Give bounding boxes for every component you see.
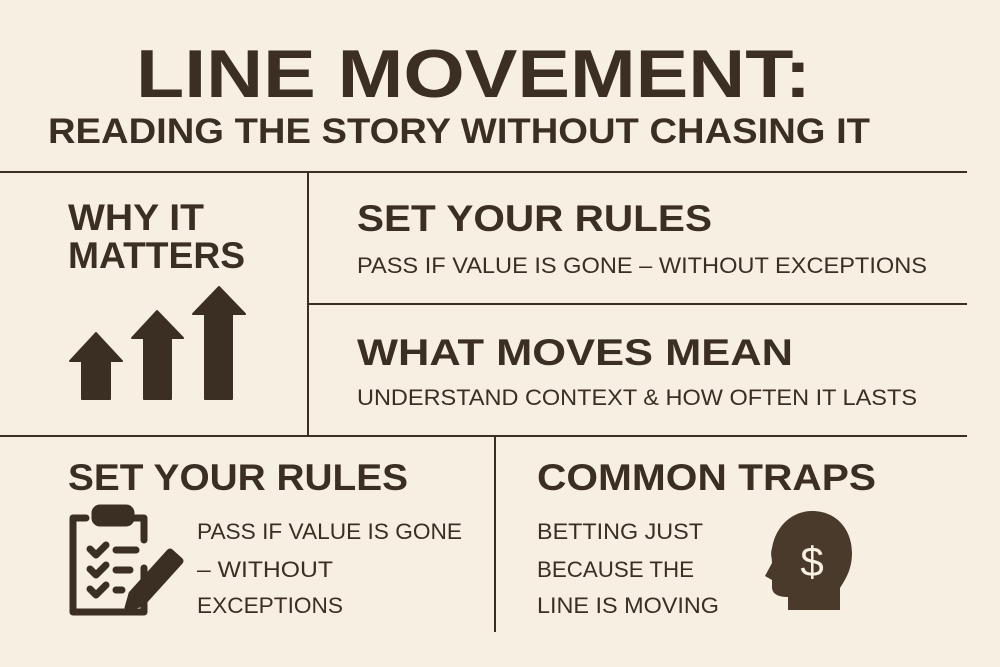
panel: why it matters: MATTERS	[68, 235, 245, 276]
panel: set your rules (top): SET YOUR RULES	[357, 198, 712, 239]
panel: common traps: LINE IS MOVING	[537, 593, 719, 618]
panel: common traps: BECAUSE THE	[537, 557, 694, 582]
panel: set your rules (bottom): – WITHOUT	[197, 557, 333, 582]
icon: rising arrows	[70, 287, 245, 399]
panel: set your rules (bottom): SET YOUR RULES	[68, 457, 408, 498]
panel: common traps: BETTING JUST	[537, 519, 703, 544]
panel: what moves mean: UNDERSTAND CONTEXT & HOW OFTEN IT LASTS	[357, 385, 917, 410]
icon: head with dollar	[765, 511, 852, 610]
icon: clipboard	[73, 508, 180, 612]
panel: common traps	[537, 457, 876, 618]
panel: set your rules (bottom): EXCEPTIONS	[197, 593, 343, 618]
icon: head with dollar: $	[800, 538, 824, 585]
panel: common traps: COMMON TRAPS	[537, 457, 876, 498]
panel: what moves mean: WHAT MOVES MEAN	[357, 332, 793, 373]
panel: set your rules (top): PASS IF VALUE IS GONE – WITHOUT EXCEPTIONS	[357, 253, 927, 278]
panel: set your rules (top)	[357, 198, 927, 278]
panel: why it matters: WHY IT	[68, 197, 204, 238]
subtitle: READING THE STORY WITHOUT CHASING IT	[48, 112, 870, 151]
panel: why it matters	[68, 197, 245, 399]
panel: set your rules (bottom): PASS IF VALUE IS GONE	[197, 519, 462, 544]
panel: what moves mean	[357, 332, 917, 410]
title: LINE MOVEMENT:	[136, 36, 811, 112]
panel: set your rules (bottom)	[68, 457, 462, 618]
